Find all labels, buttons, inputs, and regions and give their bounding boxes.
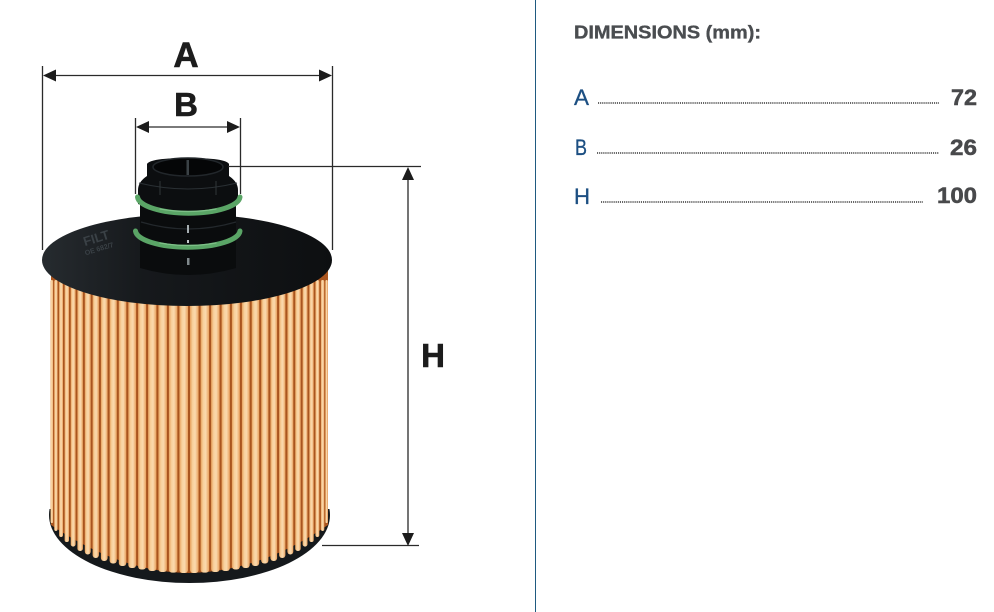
row B bbox=[575, 135, 977, 160]
pleated paper body bbox=[50, 270, 328, 573]
label H: H bbox=[421, 337, 445, 374]
green O-rings bbox=[136, 197, 240, 247]
neck bbox=[138, 158, 238, 275]
top cap bbox=[42, 214, 332, 306]
dimension B bbox=[136, 86, 240, 194]
row B: 26 bbox=[950, 135, 977, 160]
cap lettering bbox=[79, 227, 115, 257]
bottom cap bbox=[49, 509, 330, 583]
row H: 100 bbox=[937, 183, 977, 208]
row A bbox=[574, 85, 977, 110]
oil filter photo bbox=[42, 158, 332, 583]
label B: B bbox=[174, 86, 198, 123]
row H: H bbox=[574, 184, 590, 209]
dimension H bbox=[228, 166, 445, 546]
panel divider bbox=[535, 0, 536, 612]
panel: dimensions bbox=[574, 22, 977, 209]
label A: A bbox=[173, 36, 199, 75]
row B: B bbox=[575, 135, 587, 160]
heading: DIMENSIONS (mm): bbox=[574, 22, 761, 42]
cap lettering: OE 682/7 bbox=[84, 242, 115, 257]
row A: 72 bbox=[951, 85, 977, 110]
row A: A bbox=[574, 85, 589, 110]
cap lettering: FILT bbox=[81, 227, 111, 249]
row H bbox=[574, 183, 977, 209]
dimension A bbox=[42, 36, 332, 250]
